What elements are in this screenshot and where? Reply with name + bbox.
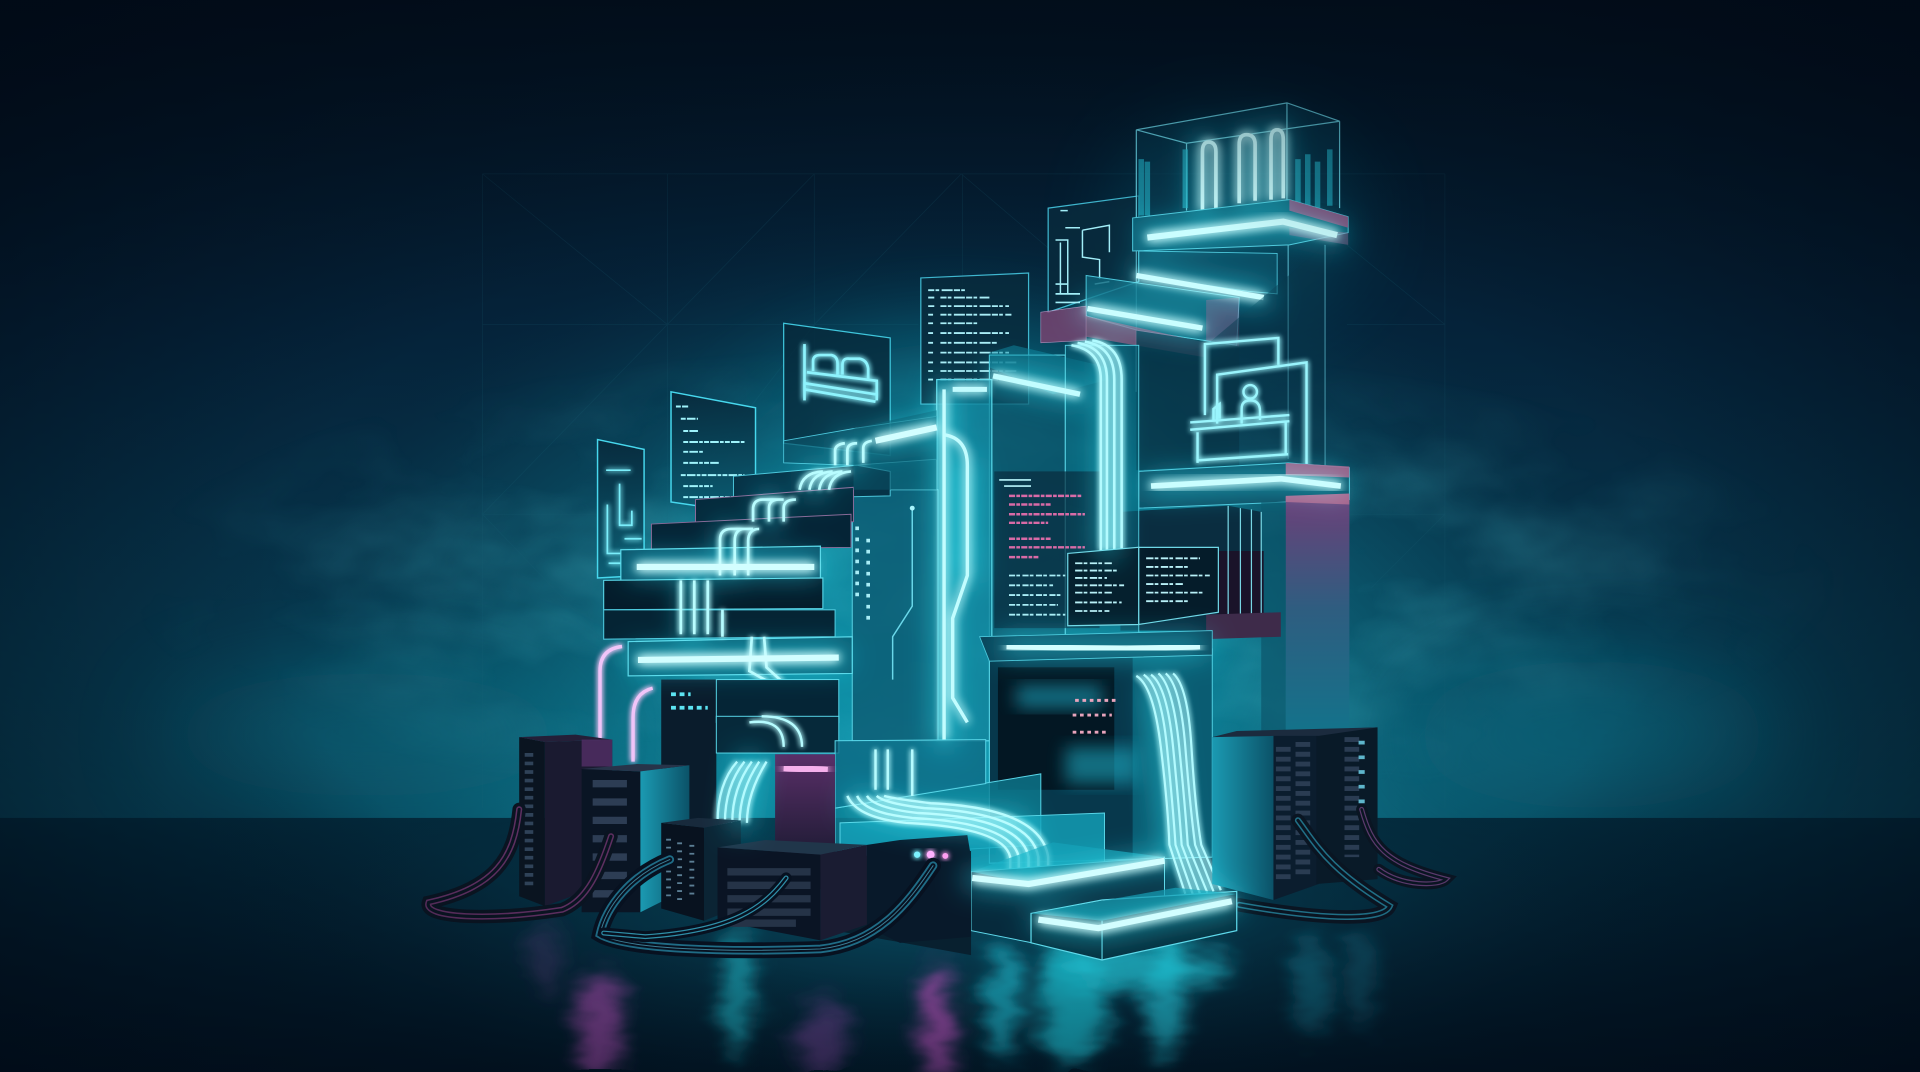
reflective floor <box>0 818 1920 1072</box>
neon: left stair bright bars <box>637 427 937 660</box>
glass stairs, centre low <box>835 740 1104 955</box>
server tower C <box>661 818 741 921</box>
panel: floor plan, top right <box>1048 196 1139 312</box>
neon strip <box>1147 222 1337 238</box>
server tower D <box>718 840 867 940</box>
panel: code, left <box>671 392 756 514</box>
smoke texture <box>287 416 1688 728</box>
neon strips <box>1087 275 1264 328</box>
neon arches <box>1202 130 1283 211</box>
glass step box, neon upper <box>971 842 1164 943</box>
neon bloom overlay <box>637 130 1341 928</box>
faded teal bars <box>1141 149 1330 216</box>
top display box with neon arches <box>1136 103 1340 218</box>
neon wires: centre step <box>749 716 1048 884</box>
tall purple block with pink strip <box>775 754 835 889</box>
tier: top slab <box>1133 200 1348 251</box>
neon ribbon: tall right <box>1136 673 1221 894</box>
neon strip <box>1151 479 1341 486</box>
panel: code, centre lower <box>994 471 1100 628</box>
background wall <box>0 90 1920 818</box>
status LEDs <box>914 851 948 859</box>
cables: left and middle bundles <box>428 809 933 950</box>
screens: floating terminals <box>1068 547 1218 626</box>
server racks, right <box>1212 727 1378 900</box>
glass step box, neon lower <box>1031 888 1237 960</box>
tower lower column <box>1139 463 1349 747</box>
ambient glow behind structure <box>686 135 1347 833</box>
right tower glass frame <box>1136 239 1325 465</box>
neon: left stair wires <box>681 441 872 722</box>
mid-left circuit column <box>852 490 938 741</box>
ribbon: left <box>718 762 767 823</box>
neon: purple cables <box>600 647 653 762</box>
server with LEDs <box>867 835 971 943</box>
stair: left steps <box>604 410 937 676</box>
centre glass column <box>937 345 1139 741</box>
neon: thin low strip <box>618 631 722 633</box>
neon main vertical and arch <box>944 376 1080 740</box>
icon: reception desk <box>1190 338 1307 468</box>
neon strip <box>1007 647 1200 649</box>
panel: code, centre <box>921 273 1029 404</box>
cables: right <box>1239 809 1446 917</box>
neon pink strip <box>784 768 828 770</box>
floor reflections <box>528 924 1378 1072</box>
faint background grid <box>482 174 1445 808</box>
icon: bed <box>804 344 877 402</box>
server: back block <box>661 680 839 820</box>
server tower A <box>519 735 612 906</box>
tier: stair glass steps <box>1041 251 1277 358</box>
dark rack with stripes <box>1120 506 1281 639</box>
mid lower glass box with screens <box>980 631 1212 863</box>
panel: bed icon <box>784 323 890 455</box>
dark tower body <box>1136 245 1325 470</box>
neon bundle: centre column cables <box>1071 340 1122 551</box>
panel: floor plan, left <box>598 440 644 578</box>
server tower B <box>582 764 689 912</box>
